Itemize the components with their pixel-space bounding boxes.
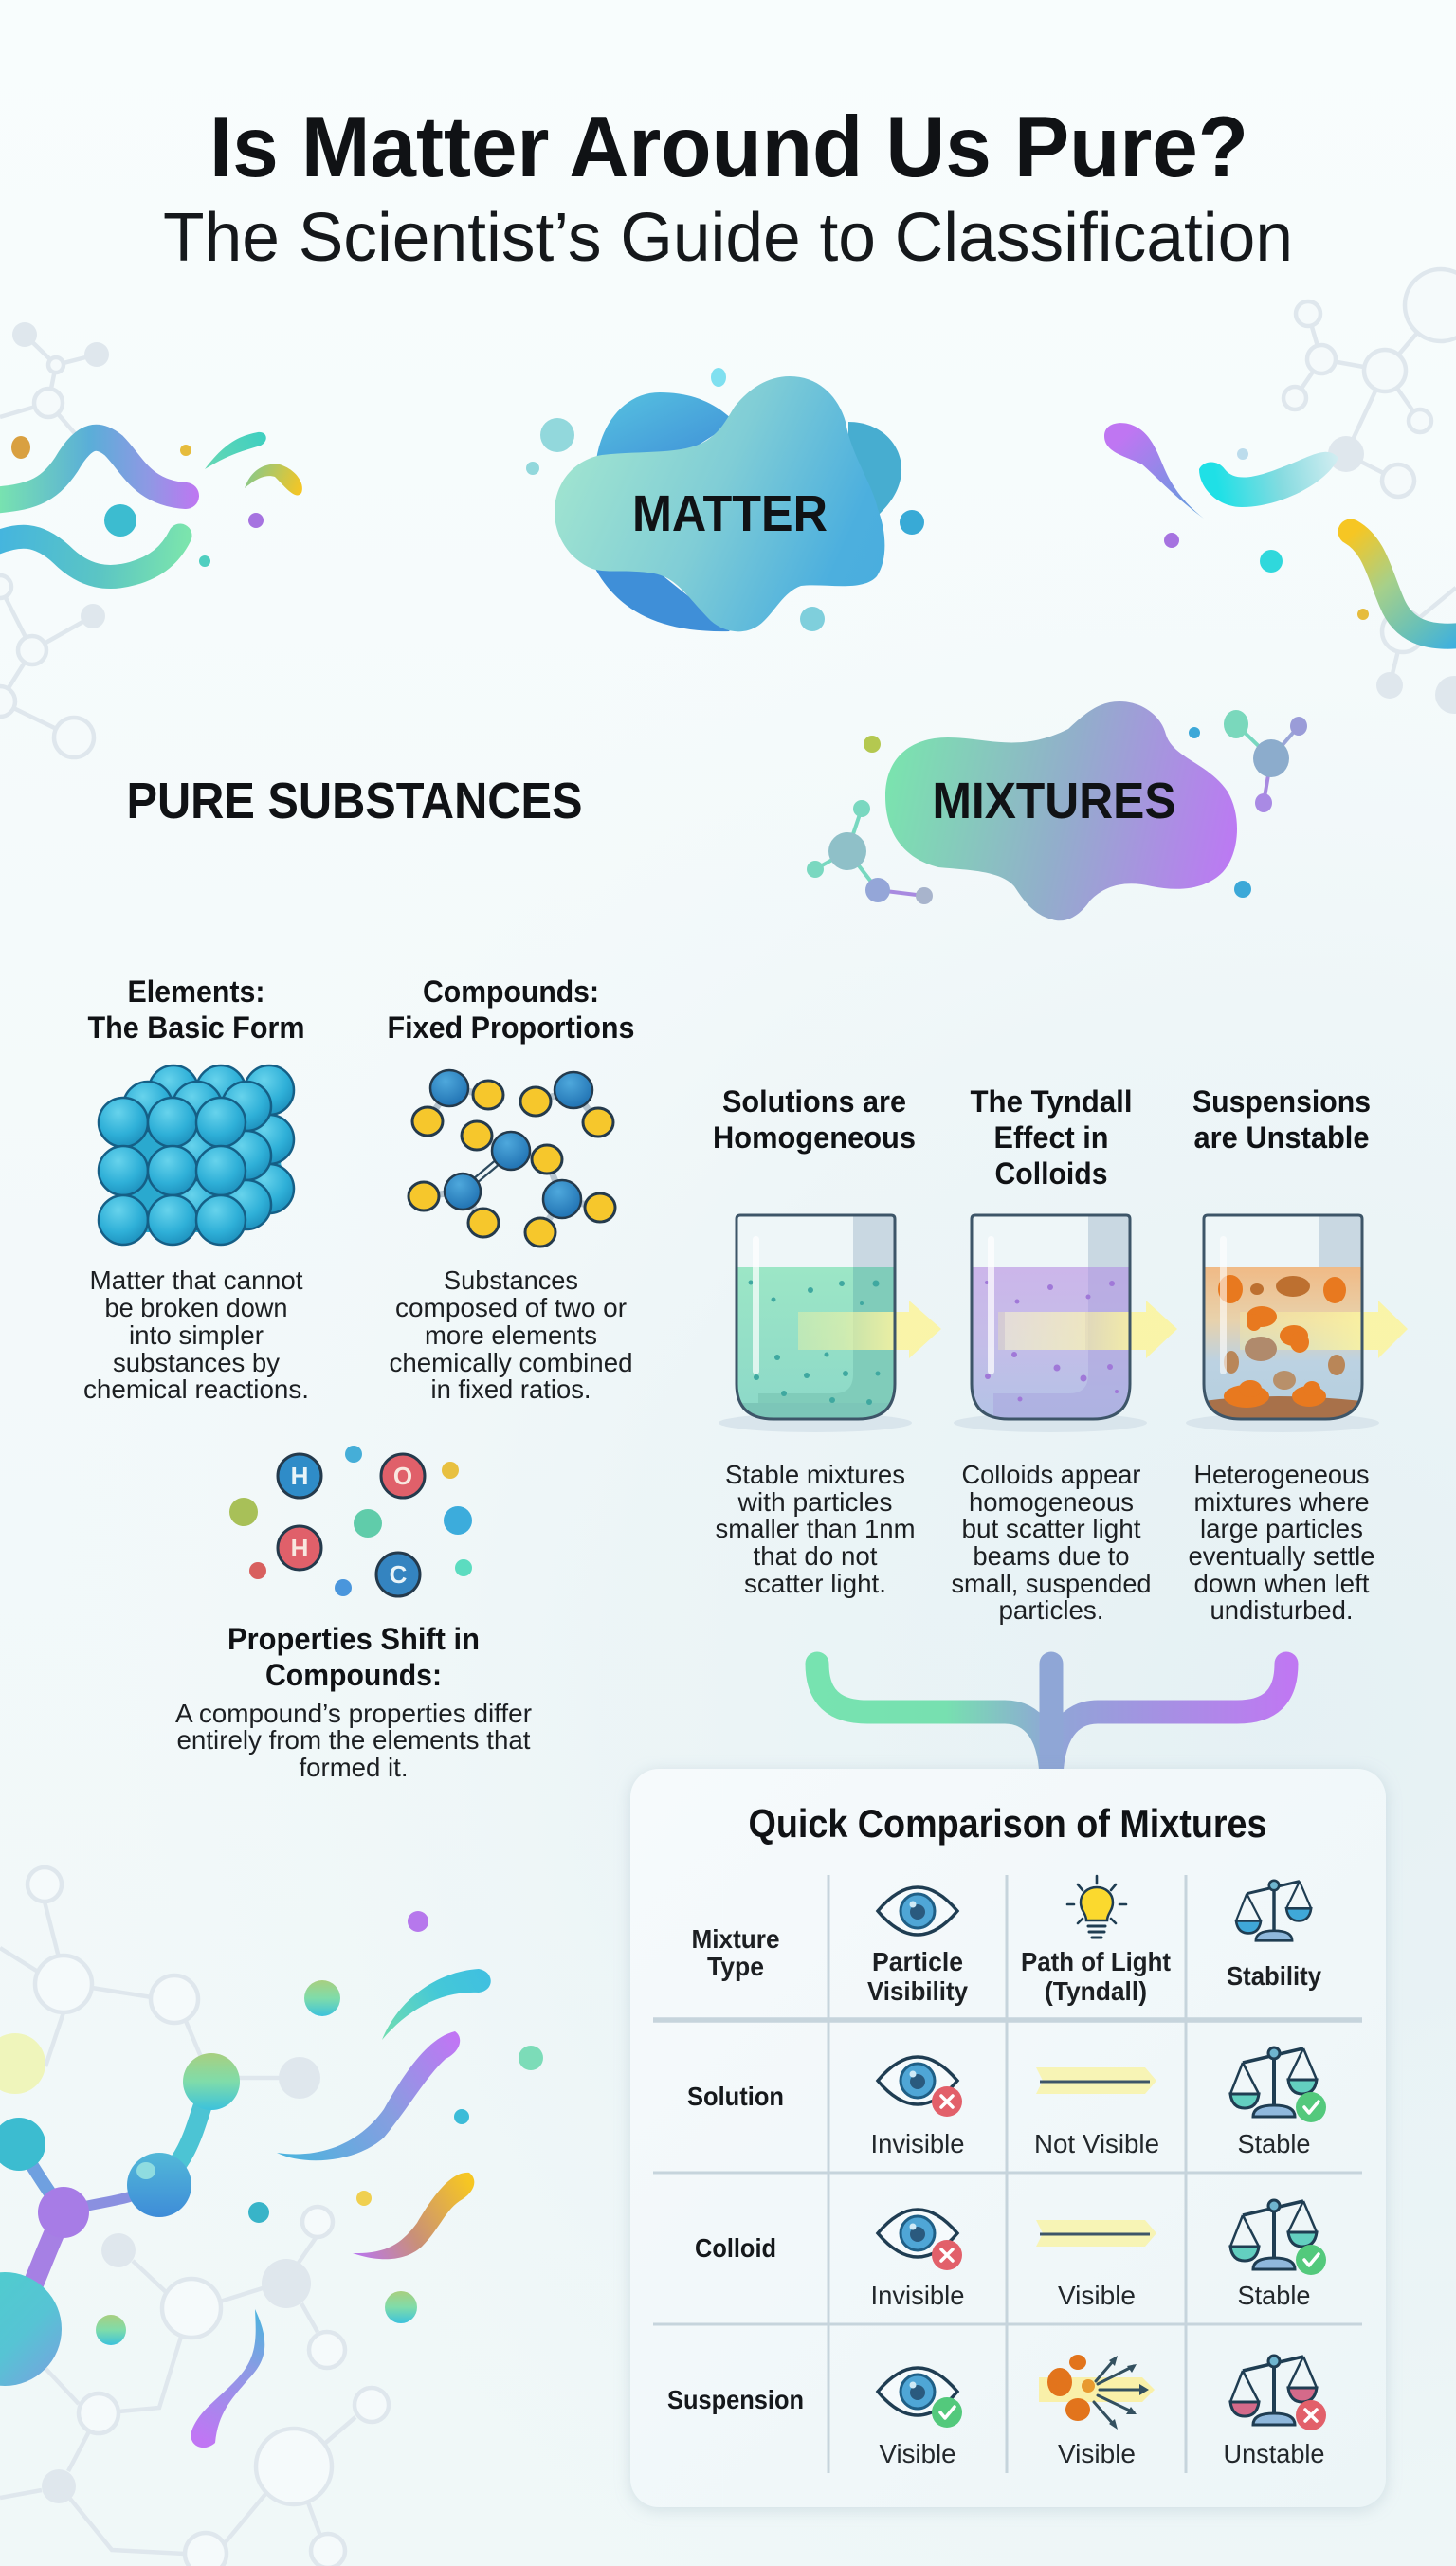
panel: compounds xyxy=(387,974,635,1404)
compounds description: Substances xyxy=(444,1265,578,1295)
header: path of light: Path of Light xyxy=(1021,1947,1171,1976)
row: suspension: Suspension xyxy=(667,2385,804,2414)
row: solution: Stable xyxy=(1238,2129,1310,2158)
compounds description: more elements xyxy=(425,1320,597,1350)
elements description: substances by xyxy=(113,1348,280,1377)
elements description: chemical reactions. xyxy=(83,1374,309,1404)
suspensions heading: Suspensions xyxy=(1192,1084,1371,1119)
row: suspension: Visible xyxy=(1058,2439,1136,2468)
panel: properties shift xyxy=(175,1446,532,1782)
solutions heading xyxy=(713,1084,916,1155)
decoration: top right swooshes and droplets xyxy=(1104,423,1456,636)
row: suspension: Visible xyxy=(880,2439,956,2468)
compounds description: in fixed ratios. xyxy=(430,1374,592,1404)
compounds heading xyxy=(387,974,635,1045)
properties description: formed it. xyxy=(300,1753,408,1782)
row: colloid: Invisible xyxy=(870,2281,965,2310)
solutions description: scatter light. xyxy=(744,1569,886,1598)
suspensions description xyxy=(1189,1460,1374,1625)
panel: solutions xyxy=(713,1084,941,1598)
elements description xyxy=(83,1265,309,1404)
suspensions description: large particles xyxy=(1200,1514,1363,1543)
header: stability xyxy=(1227,1881,1321,1991)
panel: suspensions xyxy=(1186,1084,1408,1625)
solutions description: smaller than 1nm xyxy=(715,1514,916,1543)
compounds heading: Fixed Proportions xyxy=(387,1010,635,1045)
matter label: MATTER xyxy=(632,485,828,542)
properties description xyxy=(175,1699,532,1782)
properties description: entirely from the elements that xyxy=(176,1725,531,1755)
tyndall heading: Colloids xyxy=(995,1156,1107,1191)
row: colloid: Visible xyxy=(1058,2281,1136,2310)
row: colloid: Colloid xyxy=(695,2233,776,2263)
background molecule network: bottom left xyxy=(0,1867,389,2566)
row: colloid: Stable xyxy=(1238,2281,1310,2310)
panel: quick comparison table xyxy=(630,1769,1386,2507)
icon: scattered light xyxy=(1039,2355,1155,2430)
subtitle: The Scientist’s Guide to Classification xyxy=(163,200,1293,276)
properties description: A compound’s properties differ xyxy=(175,1699,532,1728)
background molecule network: top left xyxy=(0,322,109,757)
icon: colloid beaker xyxy=(954,1215,1177,1432)
tyndall heading xyxy=(971,1084,1132,1191)
header: stability: Stability xyxy=(1227,1961,1321,1991)
mixtures blob xyxy=(807,701,1307,920)
elements heading: The Basic Form xyxy=(87,1010,305,1045)
tyndall heading: The Tyndall xyxy=(971,1084,1132,1119)
icon: labelled atoms xyxy=(229,1446,472,1596)
row: colloid xyxy=(695,2200,1326,2310)
icon: solution beaker xyxy=(719,1215,941,1432)
icon: labelled atoms: H xyxy=(291,1534,308,1562)
tyndall description: homogeneous xyxy=(969,1487,1134,1517)
suspensions heading: are Unstable xyxy=(1194,1120,1369,1155)
row: solution: Invisible xyxy=(870,2129,965,2158)
header: particle visibility: Particle xyxy=(872,1947,963,1976)
header: mixture type xyxy=(692,1924,779,1981)
compounds description: chemically combined xyxy=(389,1348,633,1377)
solutions heading: Solutions are xyxy=(722,1084,906,1119)
header: particle visibility xyxy=(867,1887,968,2006)
elements heading: Elements: xyxy=(127,974,265,1009)
solutions description: Stable mixtures xyxy=(725,1460,905,1489)
row: solution: Not Visible xyxy=(1034,2129,1159,2158)
elements heading xyxy=(87,974,305,1045)
elements description: into simpler xyxy=(129,1320,264,1350)
tyndall heading: Effect in xyxy=(993,1120,1109,1155)
tyndall description: Colloids appear xyxy=(961,1460,1141,1489)
header: particle visibility: Visibility xyxy=(867,1976,968,2006)
panel: elements xyxy=(83,974,309,1404)
bracket connector xyxy=(817,1664,1286,1782)
compounds description: composed of two or xyxy=(395,1293,627,1322)
row: solution: Solution xyxy=(687,2082,784,2111)
compounds description xyxy=(389,1265,633,1404)
tyndall description: beams due to xyxy=(973,1541,1130,1571)
panel: tyndall effect xyxy=(952,1084,1177,1625)
properties heading xyxy=(228,1622,480,1692)
compounds heading: Compounds: xyxy=(423,974,599,1009)
solutions heading: Homogeneous xyxy=(713,1120,916,1155)
tyndall description: small, suspended xyxy=(952,1569,1151,1598)
solutions description: that do not xyxy=(753,1541,878,1571)
matter blob xyxy=(526,368,924,631)
properties heading: Properties Shift in xyxy=(228,1622,480,1656)
decoration: bottom left molecule and swooshes xyxy=(0,1911,543,2448)
table title: Quick Comparison of Mixtures xyxy=(749,1801,1266,1846)
row: suspension: Unstable xyxy=(1223,2439,1325,2468)
icon: atom lattice xyxy=(99,1065,294,1245)
icon: labelled atoms: O xyxy=(393,1462,412,1490)
tyndall description: but scatter light xyxy=(961,1514,1141,1543)
icon: labelled atoms: H xyxy=(291,1462,308,1490)
suspensions description: mixtures where xyxy=(1194,1487,1369,1517)
background molecule network: top right xyxy=(1283,269,1456,714)
properties heading: Compounds: xyxy=(265,1658,442,1692)
solutions description xyxy=(715,1460,916,1598)
decoration: top left waves and droplets xyxy=(0,432,302,576)
elements description: be broken down xyxy=(104,1293,288,1322)
solutions description: with particles xyxy=(737,1487,893,1517)
tyndall description xyxy=(952,1460,1151,1625)
tyndall description: particles. xyxy=(999,1595,1103,1625)
suspensions description: eventually settle xyxy=(1189,1541,1374,1571)
row: solution xyxy=(687,2047,1326,2158)
header: path of light xyxy=(1021,1876,1171,2006)
icon: molecules xyxy=(409,1070,615,1247)
title: Is Matter Around Us Pure? xyxy=(209,100,1248,195)
header: mixture type: Mixture xyxy=(692,1924,779,1954)
pure substances heading: PURE SUBSTANCES xyxy=(127,773,582,829)
suspensions description: down when left xyxy=(1194,1569,1370,1598)
suspensions heading xyxy=(1192,1084,1371,1155)
header: mixture type: Type xyxy=(707,1952,764,1981)
header: path of light: (Tyndall) xyxy=(1045,1976,1147,2006)
suspensions description: Heterogeneous xyxy=(1194,1460,1369,1489)
mixtures label: MIXTURES xyxy=(933,773,1175,829)
elements description: Matter that cannot xyxy=(89,1265,303,1295)
icon: suspension beaker xyxy=(1186,1215,1408,1432)
row: suspension xyxy=(667,2355,1326,2468)
suspensions description: undisturbed. xyxy=(1210,1595,1354,1625)
icon: labelled atoms: C xyxy=(390,1560,408,1589)
